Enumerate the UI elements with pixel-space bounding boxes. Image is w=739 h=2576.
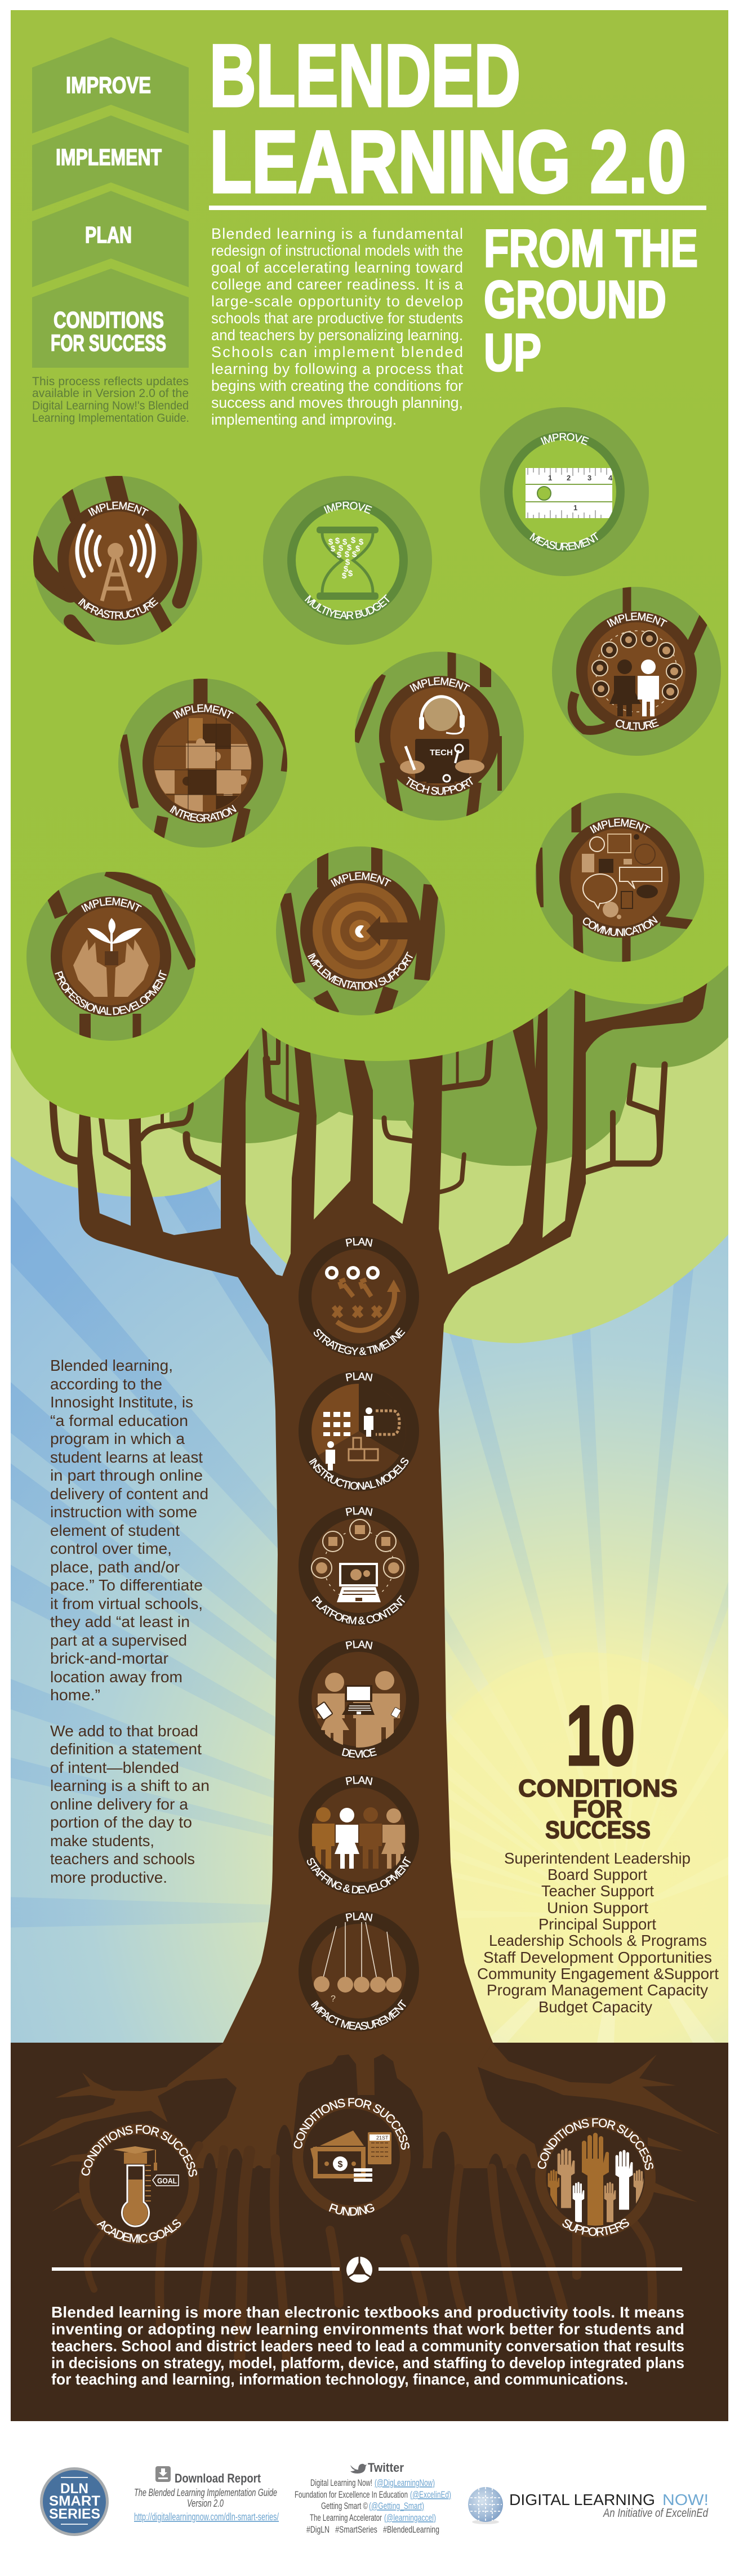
badge: implement culture: IMPLEMENT <box>607 613 667 627</box>
badge: implement integration: IMPLEMENT <box>173 704 234 719</box>
badge: conditions academic goals: ACADEMIC GOALS <box>95 2217 184 2245</box>
icon: hourglass: $ <box>347 543 352 552</box>
intro paragraph: college and career readiness. It is a <box>211 276 464 293</box>
badge: plan strategy and timeline: PLAN <box>346 1238 373 1247</box>
text: definition of blended learning: pace.” To differentiate <box>50 1576 203 1594</box>
closing paragraph: in decisions on strategy, model, platform, device, and staffing to develop integrated plans <box>51 2354 684 2372</box>
icon: raised hands <box>548 2133 645 2226</box>
icon: hourglass: $ <box>345 558 350 567</box>
footer: twitter: Digital Learning Now! <box>310 2477 372 2488</box>
icon: pie of classroom models <box>311 1384 406 1470</box>
intro paragraph: implementing and improving. <box>211 411 397 428</box>
badge: plan strategy and timeline: STRATEGY & TIMELINE <box>313 1327 406 1355</box>
badge: plan device: PLAN <box>346 1640 373 1650</box>
footer: twitter: The Learning Accelerator <box>310 2512 382 2523</box>
icon: laptop with content circles <box>311 1519 404 1602</box>
footer: twitter: Twitter <box>368 2461 404 2475</box>
subtitle: UP <box>484 323 541 382</box>
icon: graduation thermometer: GOAL <box>157 2176 177 2185</box>
icon: people with devices <box>315 1671 401 1750</box>
text: definition of blended learning: of intent—blended <box>50 1759 179 1776</box>
text: definition of blended learning: program in which a <box>50 1430 185 1447</box>
badge: implement communication: IMPLEMENT <box>590 819 651 834</box>
long roots <box>87 2146 652 2365</box>
text: definition of blended learning: delivery of content and <box>50 1485 208 1503</box>
chevron: plan <box>32 191 189 287</box>
list: ten conditions: Union Support <box>547 1899 648 1917</box>
icon: hourglass: $ <box>331 544 336 554</box>
footer logo: digital learning now: DIGITAL LEARNING <box>509 2491 655 2508</box>
badge: improve multiyear budget <box>263 476 432 645</box>
icon: hourglass: $ <box>344 564 349 574</box>
list: ten conditions: Program Management Capacity <box>487 1981 708 1999</box>
chevron labels: PLAN <box>85 222 132 248</box>
chevron labels: IMPLEMENT <box>56 144 162 170</box>
icon: money and calculator <box>310 2131 391 2182</box>
intro paragraph: learning by following a process that <box>211 360 463 377</box>
badge: plan impact measurement: IMPACT MEASUREMENT <box>308 1998 410 2033</box>
icon: hourglass: $ <box>337 550 342 560</box>
text: definition of blended learning: learning is a shift to an <box>50 1777 210 1794</box>
icon: globe <box>468 2487 503 2524</box>
text: definition of blended learning: portion of the day to <box>50 1813 192 1831</box>
icon: ruler: 1 <box>573 503 577 512</box>
title: BLENDED <box>210 27 520 125</box>
badge: conditions academic goals <box>79 2123 199 2245</box>
badge: implement infrastructure: INFRASTRUCTURE <box>78 597 158 620</box>
badge: conditions supporters: CONDITIONS FOR SUCCESS <box>535 2116 656 2172</box>
footer: download report: The Blended Learning Implementation Guide <box>134 2487 277 2498</box>
text: definition of blended learning: Innosight Institute, is <box>50 1393 193 1411</box>
sun disc <box>446 1652 728 2003</box>
badge: plan instructional models: INSTRUCTIONAL MODELS <box>309 1458 409 1490</box>
closing paragraph: Blended learning is more than electronic textbooks and productivity tools. It means <box>51 2303 684 2321</box>
closing paragraph: for teaching and learning, information technology, finance, and communications. <box>51 2370 628 2388</box>
list: ten conditions: Teacher Support <box>541 1882 654 1900</box>
badge: plan staffing and development: PLAN <box>345 1775 373 1788</box>
badge: plan strategy and timeline <box>299 1236 419 1358</box>
badge: conditions funding <box>291 2096 412 2218</box>
footer: twitter: (@Getting_Smart) <box>369 2501 424 2511</box>
footer: download report: Download Report <box>175 2471 261 2485</box>
badge: implement professional development <box>26 872 195 1041</box>
badge: plan instructional models: PLAN <box>346 1372 373 1381</box>
tree trunk and branches <box>78 957 711 2043</box>
list: ten conditions <box>477 1849 719 2016</box>
footer: twitter <box>295 2461 451 2535</box>
chevrons: process steps <box>32 37 189 368</box>
intro paragraph <box>211 225 464 428</box>
badge: plan device <box>299 1639 419 1759</box>
badge: plan staffing and development <box>299 1775 419 1895</box>
ground <box>11 2043 728 2421</box>
text: definition of blended learning: it from virtual schools, <box>50 1595 203 1612</box>
icon: puzzle pieces <box>154 718 251 812</box>
sun rays <box>11 1186 728 2043</box>
icon: download <box>155 2466 171 2482</box>
intro paragraph: schools that are productive for students <box>211 310 463 327</box>
intro paragraph: and teachers by personalizing learning. <box>211 327 463 344</box>
intro paragraph: begins with creating the conditions for <box>211 377 463 394</box>
heading: 10 conditions for success: CONDITIONS <box>518 1775 678 1802</box>
list: ten conditions: Board Support <box>547 1866 647 1883</box>
text: definition of blended learning: instruction with some <box>50 1503 197 1521</box>
badge: conditions funding: FUNDING <box>327 2201 376 2218</box>
heading: 10 conditions for success <box>518 1688 678 1844</box>
icon: twitter bird <box>350 2464 367 2474</box>
icon: target with arrow <box>313 883 421 979</box>
text: definition of blended learning: online delivery for a <box>50 1795 188 1813</box>
text: definition of blended learning <box>50 1357 210 1886</box>
intro paragraph: large-scale opportunity to develop <box>211 293 463 310</box>
closing paragraph: inventing or adopting new learning environments that work better for students and <box>51 2320 684 2338</box>
badge: implement implementation support: IMPLEMENT <box>331 872 391 887</box>
footer logo: DLN smart series: SERIES <box>49 2506 100 2522</box>
pale green canopy layer <box>11 957 728 1343</box>
icon: hourglass: $ <box>335 536 340 546</box>
badge: implement culture: CULTURE <box>616 719 659 730</box>
text: definition of blended learning: We add to that broad <box>50 1722 198 1740</box>
badge: plan platform and content <box>299 1505 419 1627</box>
intro paragraph: Schools can implement blended <box>211 344 463 360</box>
icon: ruler: 2 <box>567 474 571 482</box>
version note: Digital Learning Now!'s Blended <box>32 399 189 412</box>
footer: twitter: (@ExcelinEd) <box>410 2489 451 2500</box>
footer logo: digital learning now: NOW! <box>662 2491 709 2508</box>
footer: twitter: (@learningaccel) <box>384 2512 436 2523</box>
badge: implement integration <box>118 679 287 848</box>
badge: implement infrastructure <box>33 476 202 645</box>
version note: Learning Implementation Guide. <box>32 412 189 425</box>
footer: download report <box>134 2466 279 2522</box>
subtitle <box>484 219 698 382</box>
chevron labels: IMPROVE <box>66 72 151 98</box>
icon: playbook <box>327 1268 400 1330</box>
list: ten conditions: Staff Development Opportunities <box>483 1949 712 1966</box>
icon: culture circles and people <box>592 631 682 716</box>
icon: money and calculator: 21ST <box>376 2135 389 2141</box>
badge: improve measurement <box>480 407 649 576</box>
intro paragraph: redesign of instructional models with the <box>211 242 463 259</box>
text: definition of blended learning: control over time, <box>50 1540 172 1557</box>
icon: hourglass: $ <box>355 544 360 554</box>
badge: implement tech support: IMPLEMENT <box>409 677 470 692</box>
badge: implement professional development: PROFESSIONAL DEVELOPMENT <box>55 970 167 1015</box>
text: definition of blended learning: teachers and schools <box>50 1850 195 1868</box>
badge: improve measurement: MEASUREMENT <box>529 532 598 551</box>
badge: implement infrastructure: IMPLEMENT <box>88 501 149 516</box>
chevron: improve <box>32 37 189 133</box>
thin branches <box>53 1028 665 1192</box>
heading: 10 conditions for success: FOR <box>573 1795 622 1823</box>
badge: plan device: DEVICE <box>341 1748 377 1758</box>
closing paragraph <box>51 2303 684 2388</box>
footer logo: digital learning now: An Initiative of ExcelinEd <box>602 2507 709 2520</box>
icon: ruler: 3 <box>587 474 591 482</box>
badge: implement culture <box>552 587 721 756</box>
footer logo: DLN smart series: SMART <box>49 2493 100 2509</box>
badge: implement tech support <box>355 652 524 821</box>
icon: graduation thermometer <box>113 2146 179 2226</box>
icon: ruler: 1 <box>548 474 552 482</box>
badge: conditions academic goals: CONDITIONS FOR SUCCESS <box>79 2123 199 2178</box>
badge: improve multiyear budget: IMPROVE <box>323 501 372 514</box>
icon: hourglass: $ <box>359 537 364 547</box>
list: ten conditions: Leadership Schools & Programs <box>489 1932 707 1949</box>
list: ten conditions: Superintendent Leadership <box>504 1849 691 1867</box>
list: ten conditions: Community Engagement &Support <box>477 1965 719 1982</box>
text: definition of blended learning: “a formal education <box>50 1412 188 1429</box>
text: definition of blended learning: student learns at least <box>50 1449 203 1466</box>
text: definition of blended learning: location away from <box>50 1668 182 1686</box>
badge: implement integration: INTREGRATION <box>170 805 237 822</box>
text: definition of blended learning: Blended learning, <box>50 1357 173 1374</box>
icon: hourglass: $ <box>352 550 357 559</box>
icon: hourglass <box>317 527 379 600</box>
ground hollows <box>158 2054 532 2236</box>
icon: hands holding plant <box>73 918 149 997</box>
footer: twitter: Foundation for Excellence In Education <box>295 2489 408 2500</box>
badge: improve measurement: IMPROVE <box>541 433 589 445</box>
icon: newton cradle <box>314 1922 402 2004</box>
intro paragraph: Blended learning is a fundamental <box>211 225 463 242</box>
icon: hourglass: $ <box>345 550 350 559</box>
tree canopy <box>11 10 728 1120</box>
footer: download report: Version 2.0 <box>187 2498 224 2509</box>
icon: speech bubbles <box>582 834 662 919</box>
chevron: conditions for success <box>32 269 189 368</box>
footer: twitter: #DigLN #SmartSeries #BlendedLearning <box>306 2524 439 2535</box>
version note: This process reflects updates <box>32 375 189 388</box>
footer: twitter: Getting Smart © <box>321 2501 368 2511</box>
title rule <box>209 206 706 210</box>
icon: hourglass: $ <box>328 537 333 547</box>
intro paragraph: success and moves through planning, <box>211 394 463 411</box>
version note: available in Version 2.0 of the <box>32 387 189 400</box>
text: definition of blended learning: part at a supervised <box>50 1632 187 1649</box>
icon: hourglass: $ <box>342 537 348 547</box>
list: ten conditions: Principal Support <box>538 1915 656 1933</box>
text: definition of blended learning: according to the <box>50 1375 162 1393</box>
text: definition of blended learning: home.” <box>50 1686 100 1704</box>
badge: implement tech support: TECH SUPPORT <box>406 776 473 795</box>
badge: plan instructional models <box>299 1371 419 1492</box>
icon: hourglass: $ <box>351 536 356 545</box>
heading: 10 conditions for success: 10 <box>566 1688 635 1784</box>
text: definition of blended learning: more productive. <box>50 1869 167 1886</box>
intro paragraph: goal of accelerating learning toward <box>211 259 463 276</box>
title <box>210 27 686 211</box>
mid green canopy layer <box>169 957 728 1166</box>
text: definition of blended learning: brick-and-mortar <box>50 1650 168 1667</box>
icon: newton cradle: ? <box>331 1994 336 2004</box>
footer: download report: http://digitallearningnow.com/dln-smart-series/ <box>134 2511 279 2522</box>
closing paragraph: teachers. School and district leaders need to lead a community conversation that results <box>51 2337 684 2355</box>
icon: hourglass: $ <box>339 543 344 553</box>
footer logo: DLN smart series <box>40 2467 109 2536</box>
version note <box>32 375 189 425</box>
chevron labels <box>51 72 166 356</box>
icon: ruler <box>526 468 613 518</box>
chevron labels: CONDITIONS <box>54 307 164 333</box>
icon: money and calculator: $ <box>338 2160 343 2169</box>
divider with leaf logo <box>52 2257 682 2283</box>
text: definition of blended learning: place, path and/or <box>50 1558 180 1576</box>
panel: sky background <box>11 957 728 2044</box>
text: definition of blended learning: element of student <box>50 1522 180 1539</box>
text: definition of blended learning: make students, <box>50 1832 154 1849</box>
footer: twitter: (@DigLearningNow) <box>375 2477 435 2488</box>
text: definition of blended learning: they add “at least in <box>50 1613 190 1630</box>
icon: headset and laptop: TECH <box>430 748 453 757</box>
badge: plan staffing and development: STAFFING & DEVELOPMENT <box>304 1855 415 1896</box>
chevron labels: FOR SUCCESS <box>51 330 166 356</box>
badge: plan impact measurement: PLAN <box>345 1911 373 1924</box>
badge: plan platform and content: PLATFORM & CONTENT <box>312 1595 406 1624</box>
badge: implement implementation support <box>276 846 445 1015</box>
icon: headset and laptop <box>400 695 484 783</box>
subtitle: GROUND <box>484 270 666 329</box>
badge: implement professional development: IMPLEMENT <box>81 898 142 912</box>
icon: hourglass: $ <box>342 571 347 581</box>
badge: conditions funding: CONDITIONS FOR SUCCESS <box>291 2096 412 2151</box>
badge: implement communication: COMMUNICATION <box>582 916 658 936</box>
badge: conditions supporters <box>535 2117 656 2238</box>
badge: plan impact measurement <box>299 1911 419 2033</box>
chevron: implement <box>32 115 189 211</box>
text: definition of blended learning: definition a statement <box>50 1740 202 1758</box>
badge: improve multiyear budget: MULTIYEAR BUDGET <box>304 594 390 620</box>
heading: 10 conditions for success: SUCCESS <box>545 1816 651 1844</box>
icon: ruler: 4 <box>608 474 613 482</box>
icon: antenna tower <box>77 525 154 601</box>
roots <box>16 2043 720 2212</box>
badge: implement communication <box>535 793 704 962</box>
text: definition of blended learning: in part through online <box>50 1467 203 1484</box>
badge: plan platform and content: PLAN <box>346 1507 373 1516</box>
list: ten conditions: Budget Capacity <box>538 1998 652 2016</box>
badge: implement implementation support: IMPLEMENTATION SUPPORT <box>308 952 413 990</box>
footer logo: DLN smart series: DLN <box>60 2481 88 2497</box>
badge: conditions supporters: SUPPORTERS <box>560 2216 632 2239</box>
footer logo: digital learning now <box>468 2487 709 2524</box>
icon: hourglass: $ <box>348 569 353 578</box>
icon: four staff figures <box>312 1807 406 1869</box>
